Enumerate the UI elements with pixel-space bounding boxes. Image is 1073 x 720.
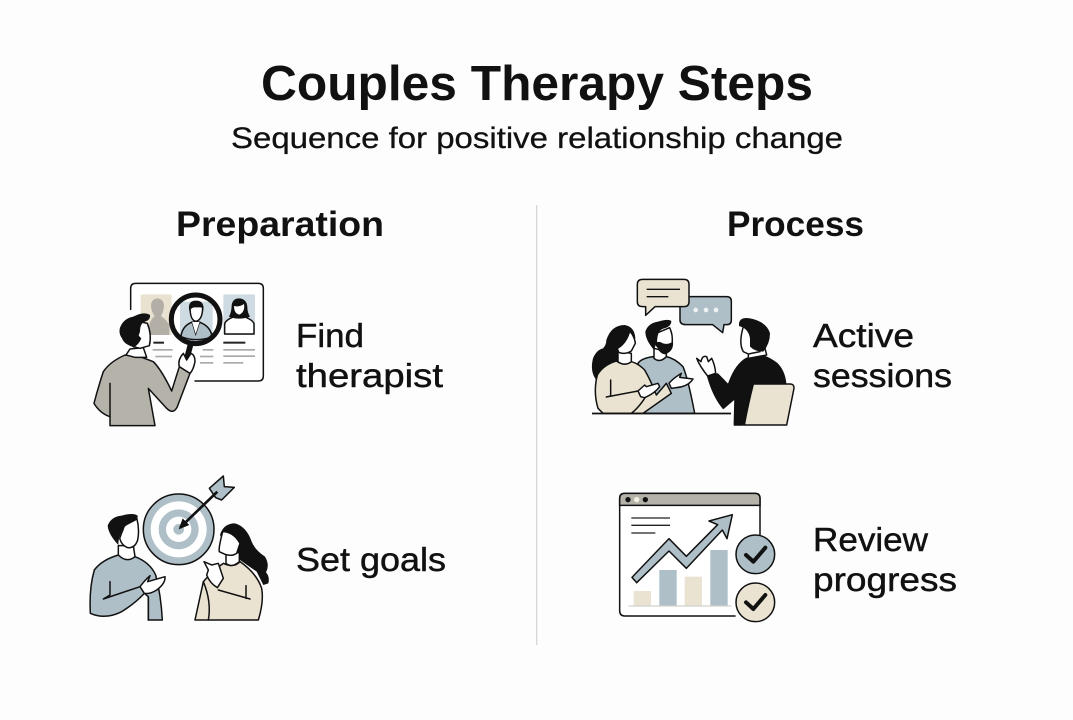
- icon: therapy session with speech bubbles: [592, 279, 794, 425]
- bearded man: [638, 357, 695, 413]
- icon: review progress chart window: [620, 493, 775, 622]
- therapist: [697, 318, 794, 425]
- icon: man searching therapist profiles with magnifier: [94, 283, 263, 426]
- woman: [592, 325, 635, 380]
- label: Find therapist: Find: [296, 317, 364, 354]
- couple: [592, 320, 695, 413]
- label: Review progress: Review: [813, 521, 928, 558]
- arrow: [179, 476, 234, 529]
- label: Active sessions: Active: [813, 317, 914, 354]
- chair: [744, 384, 794, 425]
- check badge beige: [736, 583, 775, 622]
- label: Set goals: Set goals: [296, 541, 446, 578]
- trend arrow: [632, 515, 732, 583]
- man with magnifier: [94, 313, 195, 426]
- check badge blue: [736, 535, 775, 574]
- text: progress: [813, 561, 957, 598]
- icon: couple with target: [90, 476, 269, 620]
- window: [620, 493, 760, 616]
- table edge: [592, 412, 731, 414]
- text: therapist: [296, 357, 443, 394]
- speech bubble: lines: [637, 279, 689, 315]
- bars: [629, 550, 731, 607]
- subtitle: Sequence for positive relationship change: [231, 122, 843, 155]
- speech bubble: dots: [680, 297, 731, 333]
- man: [90, 514, 165, 620]
- heading: Process: Process: [727, 205, 864, 244]
- target: [143, 494, 214, 565]
- profile board: [131, 283, 263, 381]
- title: Couples Therapy Steps: [261, 57, 813, 111]
- heading: Preparation: Preparation: [176, 205, 384, 244]
- woman: [195, 523, 269, 620]
- text: sessions: [813, 357, 952, 394]
- magnifier: [171, 295, 220, 359]
